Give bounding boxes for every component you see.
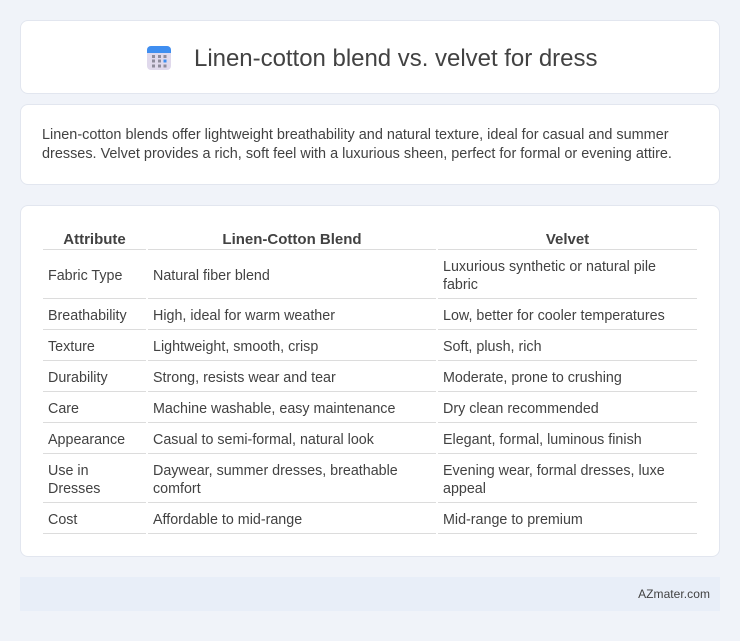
summary text: Linen-cotton blends offer lightweight breathability and natural texture, ideal for casual and summer [42, 127, 669, 143]
row: appearance [48, 432, 642, 448]
column headers [63, 231, 589, 248]
row: use in dresses: appeal [443, 481, 486, 497]
row: cost: Affordable to mid-range [153, 512, 302, 528]
summary text [42, 127, 672, 162]
row: care: Care [48, 401, 79, 417]
row: use in dresses: comfort [153, 481, 201, 497]
row: breathability: High, ideal for warm weather [153, 308, 335, 324]
row: appearance: Elegant, formal, luminous finish [443, 432, 642, 448]
row: fabric type [48, 259, 656, 293]
column headers: Velvet [546, 231, 589, 248]
row: appearance: Appearance [48, 432, 125, 448]
row: cost: Mid-range to premium [443, 512, 583, 528]
header panel [20, 20, 720, 94]
row: cost: Cost [48, 512, 77, 528]
summary panel [20, 104, 720, 185]
row: appearance: Casual to semi-formal, natural look [153, 432, 374, 448]
column headers: Attribute [63, 231, 126, 248]
footer bar [20, 577, 720, 611]
row: care: Machine washable, easy maintenance [153, 401, 395, 417]
row: durability [48, 370, 622, 386]
row: durability: Strong, resists wear and tear [153, 370, 336, 386]
table panel [20, 205, 720, 557]
title: Linen-cotton blend vs. velvet for dress [194, 45, 597, 72]
row: cost [48, 512, 583, 528]
row: fabric type: Luxurious synthetic or natural pile [443, 259, 656, 275]
row: durability: Moderate, prone to crushing [443, 370, 622, 386]
row: fabric type: Natural fiber blend [153, 268, 270, 284]
row: texture: Soft, plush, rich [443, 339, 542, 355]
footer credit: AZmater.com [638, 587, 710, 601]
icon: calendar [147, 46, 171, 70]
row: breathability: Low, better for cooler temperatures [443, 308, 665, 324]
row: care: Dry clean recommended [443, 401, 599, 417]
row: breathability [48, 308, 665, 324]
row: care [48, 401, 599, 417]
row: texture: Lightweight, smooth, crisp [153, 339, 318, 355]
row: use in dresses: Use in [48, 463, 89, 479]
row: breathability: Breathability [48, 308, 127, 324]
row: fabric type: fabric [443, 277, 478, 293]
row: texture: Texture [48, 339, 95, 355]
row: texture [48, 339, 542, 355]
row: durability: Durability [48, 370, 108, 386]
row: use in dresses: Daywear, summer dresses, breathable [153, 463, 398, 479]
summary text: dresses. Velvet provides a rich, soft feel with a luxurious sheen, perfect for formal or evening attire. [42, 146, 672, 162]
column headers: Linen-Cotton Blend [222, 231, 362, 248]
row: use in dresses: Evening wear, formal dresses, luxe [443, 463, 665, 479]
row: fabric type: Fabric Type [48, 268, 122, 284]
row: use in dresses: Dresses [48, 481, 100, 497]
row: use in dresses [48, 463, 665, 497]
